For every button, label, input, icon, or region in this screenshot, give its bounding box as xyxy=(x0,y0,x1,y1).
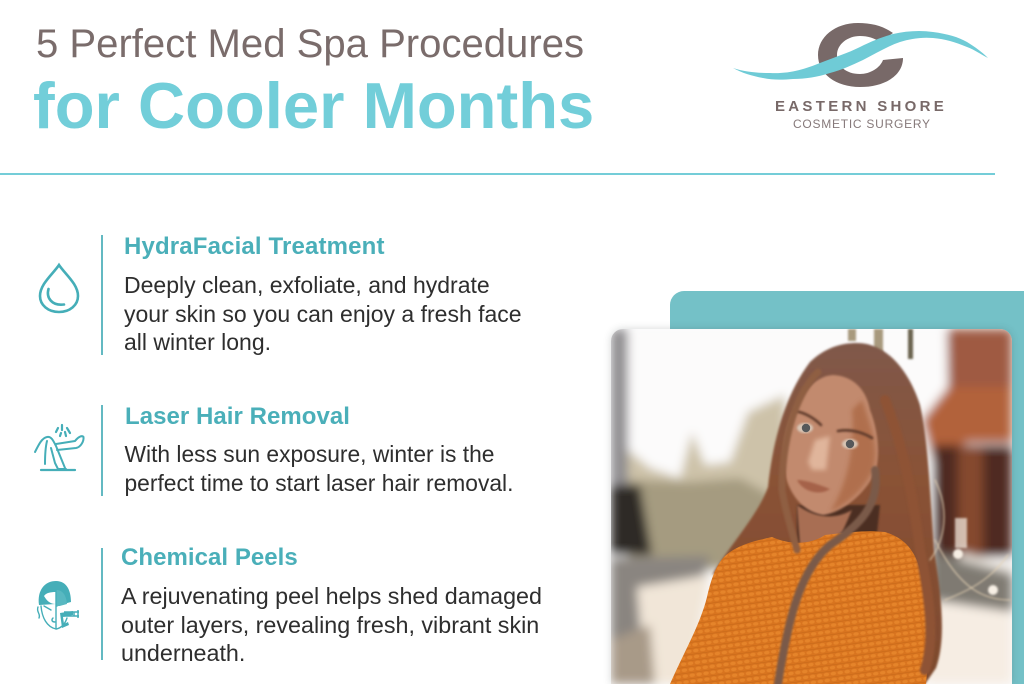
building columns xyxy=(848,329,913,359)
panel: HydraFacial Treatment xyxy=(38,232,522,355)
hair strands xyxy=(778,372,1010,684)
divider xyxy=(101,405,103,496)
divider xyxy=(101,235,103,355)
logo mark xyxy=(733,23,988,87)
icon: water drop xyxy=(38,262,80,314)
description: A rejuvenating peel helps shed damaged xyxy=(121,583,542,609)
divider xyxy=(101,548,103,660)
logo xyxy=(733,23,988,131)
description: all winter long. xyxy=(124,329,271,355)
heading: Laser Hair Removal xyxy=(125,402,350,430)
logo tagline: COSMETIC SURGERY xyxy=(793,117,931,131)
title xyxy=(33,22,594,142)
description: With less sun exposure, winter is the xyxy=(124,441,494,467)
panel: teal backing card xyxy=(670,291,1024,684)
panel: Chemical Peels xyxy=(36,544,542,666)
hair back xyxy=(712,343,942,684)
description: your skin so you can enjoy a fresh face xyxy=(124,300,522,326)
description: outer layers, revealing fresh, vibrant skin xyxy=(121,612,539,638)
icon: legs under laser xyxy=(34,424,85,472)
description: Deeply clean, exfoliate, and hydrate xyxy=(124,272,490,298)
description xyxy=(121,583,542,666)
icon: face with peel applicator xyxy=(36,581,79,630)
heading: Chemical Peels xyxy=(121,544,298,571)
bokeh lights xyxy=(953,518,998,595)
panel: Laser Hair Removal xyxy=(34,402,513,496)
header divider xyxy=(0,173,995,175)
description xyxy=(124,441,513,496)
logo name: EASTERN SHORE xyxy=(775,98,947,115)
neck xyxy=(797,505,880,552)
description: perfect time to start laser hair removal. xyxy=(124,470,513,496)
photo: woman in orange sweater xyxy=(611,329,1012,684)
facial features xyxy=(794,411,872,438)
heading: HydraFacial Treatment xyxy=(124,232,385,260)
description xyxy=(124,272,522,355)
title line 1: 5 Perfect Med Spa Procedures xyxy=(36,22,584,66)
title line 2: for Cooler Months xyxy=(33,69,594,142)
face xyxy=(784,375,878,515)
background xyxy=(611,329,1012,684)
description: underneath. xyxy=(121,640,245,666)
sweater xyxy=(670,531,928,684)
